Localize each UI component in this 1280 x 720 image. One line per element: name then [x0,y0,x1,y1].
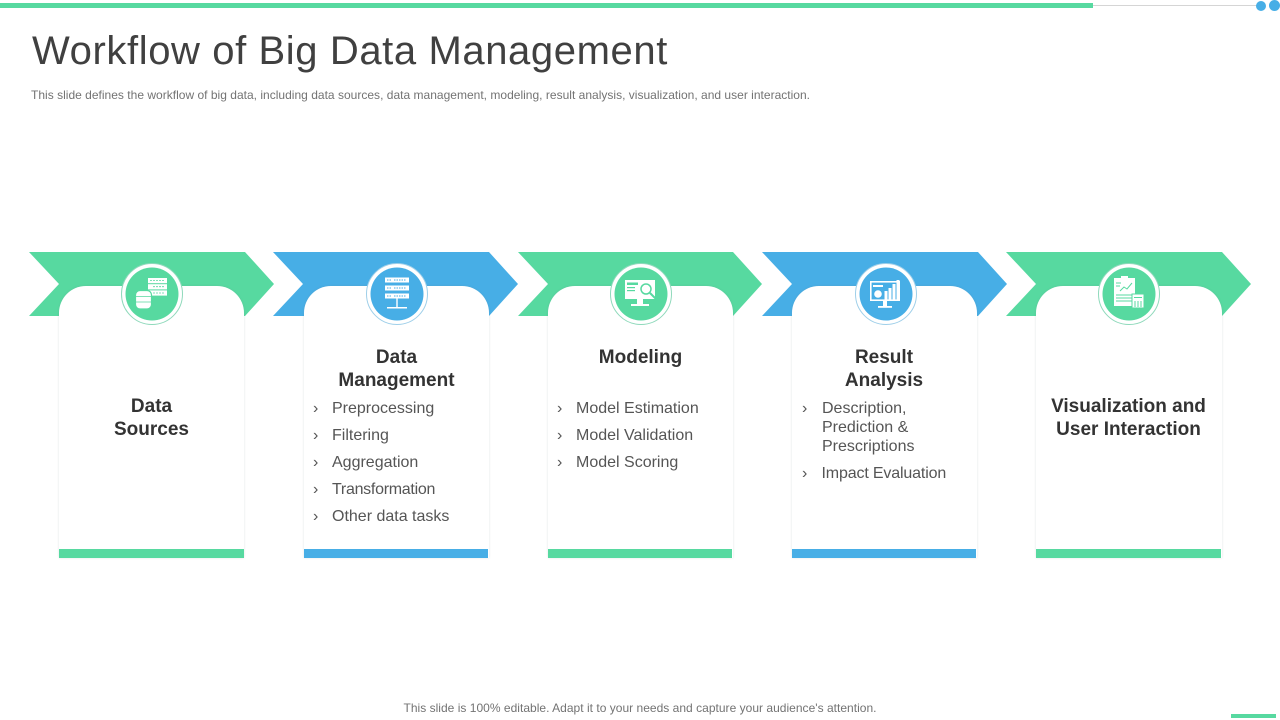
list: data management tasks [313,400,449,525]
card: result analysis [792,286,977,558]
heading: data sources: Data [131,396,172,417]
card: visualization [1036,286,1222,558]
panel: data sources [29,252,274,558]
footer note: This slide is 100% editable. Adapt it to your needs and capture your audience's attention. [403,701,877,715]
panel: result analysis [762,252,1007,558]
heading: data management: Data [376,347,417,368]
heading: result analysis: Result [855,347,913,368]
accent bar [1036,549,1221,558]
list: data management tasks: Other data tasks [332,508,449,525]
list: modeling tasks: › [557,454,562,471]
list: data management tasks: › [313,481,318,498]
list: modeling tasks: › [557,427,562,444]
list: result analysis tasks: › [802,400,807,417]
list: modeling tasks: Model Estimation [576,400,699,417]
list: modeling tasks [557,400,699,471]
heading: data management: Management [338,370,455,391]
list: modeling tasks: › [557,400,562,417]
list: data management tasks: › [313,508,318,525]
heading: data sources [114,396,189,440]
list: data management tasks: › [313,454,318,471]
panel: modeling [518,252,762,558]
accent bar [548,549,732,558]
card: data sources [59,286,244,558]
list: modeling tasks: Model Validation [576,427,693,444]
accent bar [59,549,244,558]
arrow: modeling chevron [518,252,762,316]
accent bar [792,549,976,558]
list: data management tasks: › [313,400,318,417]
heading: result analysis: Analysis [845,370,923,391]
icon: report and calculator [1098,263,1160,325]
list: result analysis tasks: Prediction & [822,419,908,436]
list: data management tasks: Transformation [332,481,435,498]
list: result analysis tasks [802,400,946,482]
list: data management tasks: › [313,427,318,444]
card: data management [304,286,489,558]
title: Workflow of Big Data Management [32,29,668,73]
icon: server rack [366,263,428,325]
card: modeling [548,286,733,558]
heading: visualization and user interaction: User Interaction [1056,419,1201,440]
panel: visualization and user interaction [1006,252,1251,558]
icon: database and server [121,263,183,325]
subtitle: This slide defines the workflow of big data, including data sources, data management, modeling, result analysis, visualization, and user interaction. [31,88,810,102]
heading: result analysis [845,347,923,391]
list: result analysis tasks: Description, [822,400,906,417]
list: result analysis tasks: Impact Evaluation [822,465,946,482]
heading: data sources: Sources [114,419,189,440]
heading: visualization and user interaction: Visualization and [1051,396,1206,417]
list: result analysis tasks: Prescriptions [822,438,914,455]
list: data management tasks: Aggregation [332,454,418,471]
heading: data management [338,347,455,391]
top progress line [0,0,1280,11]
list: modeling tasks: Model Scoring [576,454,678,471]
list: data management tasks: Filtering [332,427,389,444]
arrow: data management chevron [273,252,518,316]
arrow: data sources chevron [29,252,274,316]
heading: modeling: Modeling [599,347,682,368]
icon: monitor with magnifier [610,263,672,325]
accent bar [304,549,488,558]
arrow: visualization chevron [1006,252,1251,316]
panel: data management [273,252,518,558]
heading: visualization and user interaction [1051,396,1206,440]
list: data management tasks: Preprocessing [332,400,434,417]
icon: monitor with charts [855,263,917,325]
bottom corner accent [1231,714,1276,718]
list: result analysis tasks: › [802,465,807,482]
arrow: result analysis chevron [762,252,1007,316]
